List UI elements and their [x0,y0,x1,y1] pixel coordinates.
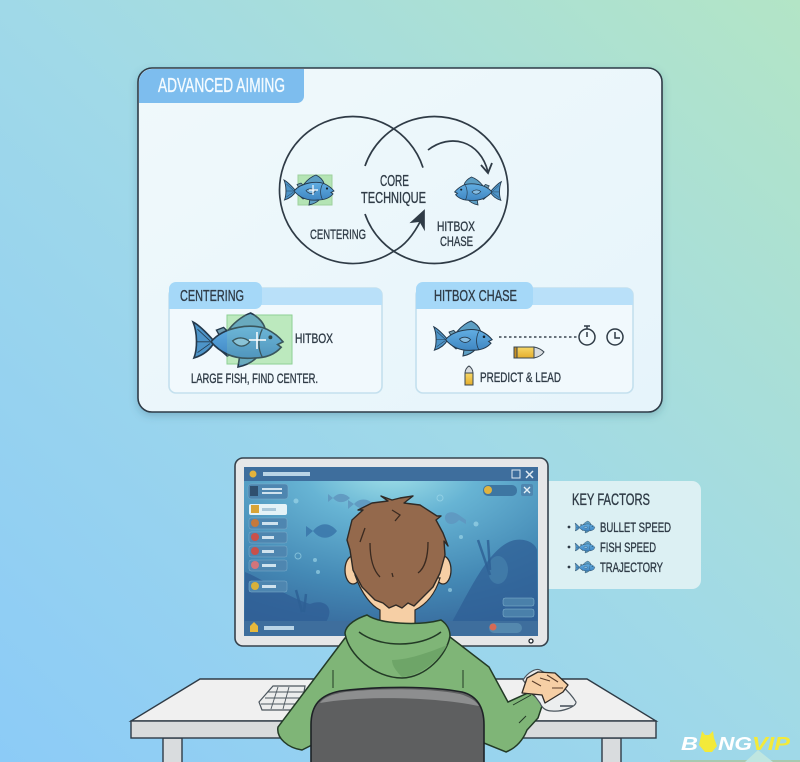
caption: predict and lead: PREDICT & LEAD [480,369,561,385]
label: centering: CENTERING [310,226,366,242]
hand and mouse [522,669,576,711]
title bar [244,467,538,481]
item: trajectory [568,559,663,575]
left circle [280,117,423,264]
watermark: B [681,734,698,754]
game screen [244,467,538,636]
hood shading [392,645,447,677]
heading: key factors: KEY FACTORS [572,490,650,509]
icon: keyboard [259,686,305,710]
bubbles [294,495,478,592]
person [278,496,576,752]
icon: bullet vertical [465,366,473,385]
heading tab: advanced aiming [139,69,304,103]
seabed silhouettes [245,572,329,622]
right circle [365,116,508,264]
label: hitbox: HITBOX [295,330,333,346]
label: core technique: CORE [380,173,409,190]
face and neck skin [355,575,440,624]
large fish with hitbox [193,313,292,367]
heading tab: hitbox chase: HITBOX CHASE [434,288,517,305]
watermark: NG [718,734,752,754]
panel: hitbox chase [416,282,633,393]
side menu [248,484,288,592]
icon: bullet horizontal [514,347,544,358]
item: bullet speed: BULLET SPEED [600,519,671,535]
chair [311,687,484,762]
hair [347,496,448,608]
heading tab: centering: CENTERING [180,288,244,305]
label: hitbox chase [437,218,475,249]
panel: advanced aiming [138,68,662,412]
ears [345,556,451,584]
label: hitbox chase: CHASE [440,233,473,249]
arrow: hitbox chase curve [428,141,492,173]
item: trajectory: TRAJECTORY [600,559,663,575]
power button [529,639,533,643]
table [131,679,656,762]
icon: clock [607,329,623,345]
hoodie [278,615,543,752]
venn right fish [455,177,501,205]
bottom strip [670,750,800,762]
panel: key factors [540,481,701,589]
background fish [306,494,466,538]
bottom right buttons [503,598,534,617]
bottom bar [244,621,538,636]
venn left fish with hitbox [284,175,334,205]
panel: centering [169,282,382,393]
watermark: VIP [752,734,791,754]
dotted lead line [499,336,578,338]
label: core technique: TECHNIQUE [361,190,426,207]
item: fish speed: FISH SPEED [600,539,656,555]
heading tab: advanced aiming: ADVANCED AIMING [158,75,285,97]
chase fish [434,321,492,356]
caption: large fish: LARGE FISH, FIND CENTER. [191,370,318,386]
item: bullet speed [568,519,671,535]
icon: stopwatch [579,326,595,345]
heading tab: centering [169,282,262,309]
arrow: centering to core [394,211,424,251]
label: hitbox chase: HITBOX [437,218,475,234]
venn diagram [280,116,508,264]
heading tab: hitbox chase [416,282,533,309]
monitor [235,458,548,646]
top right buttons [483,484,533,496]
item: fish speed [568,539,656,555]
watermark [681,731,791,754]
label: core technique [361,173,426,207]
